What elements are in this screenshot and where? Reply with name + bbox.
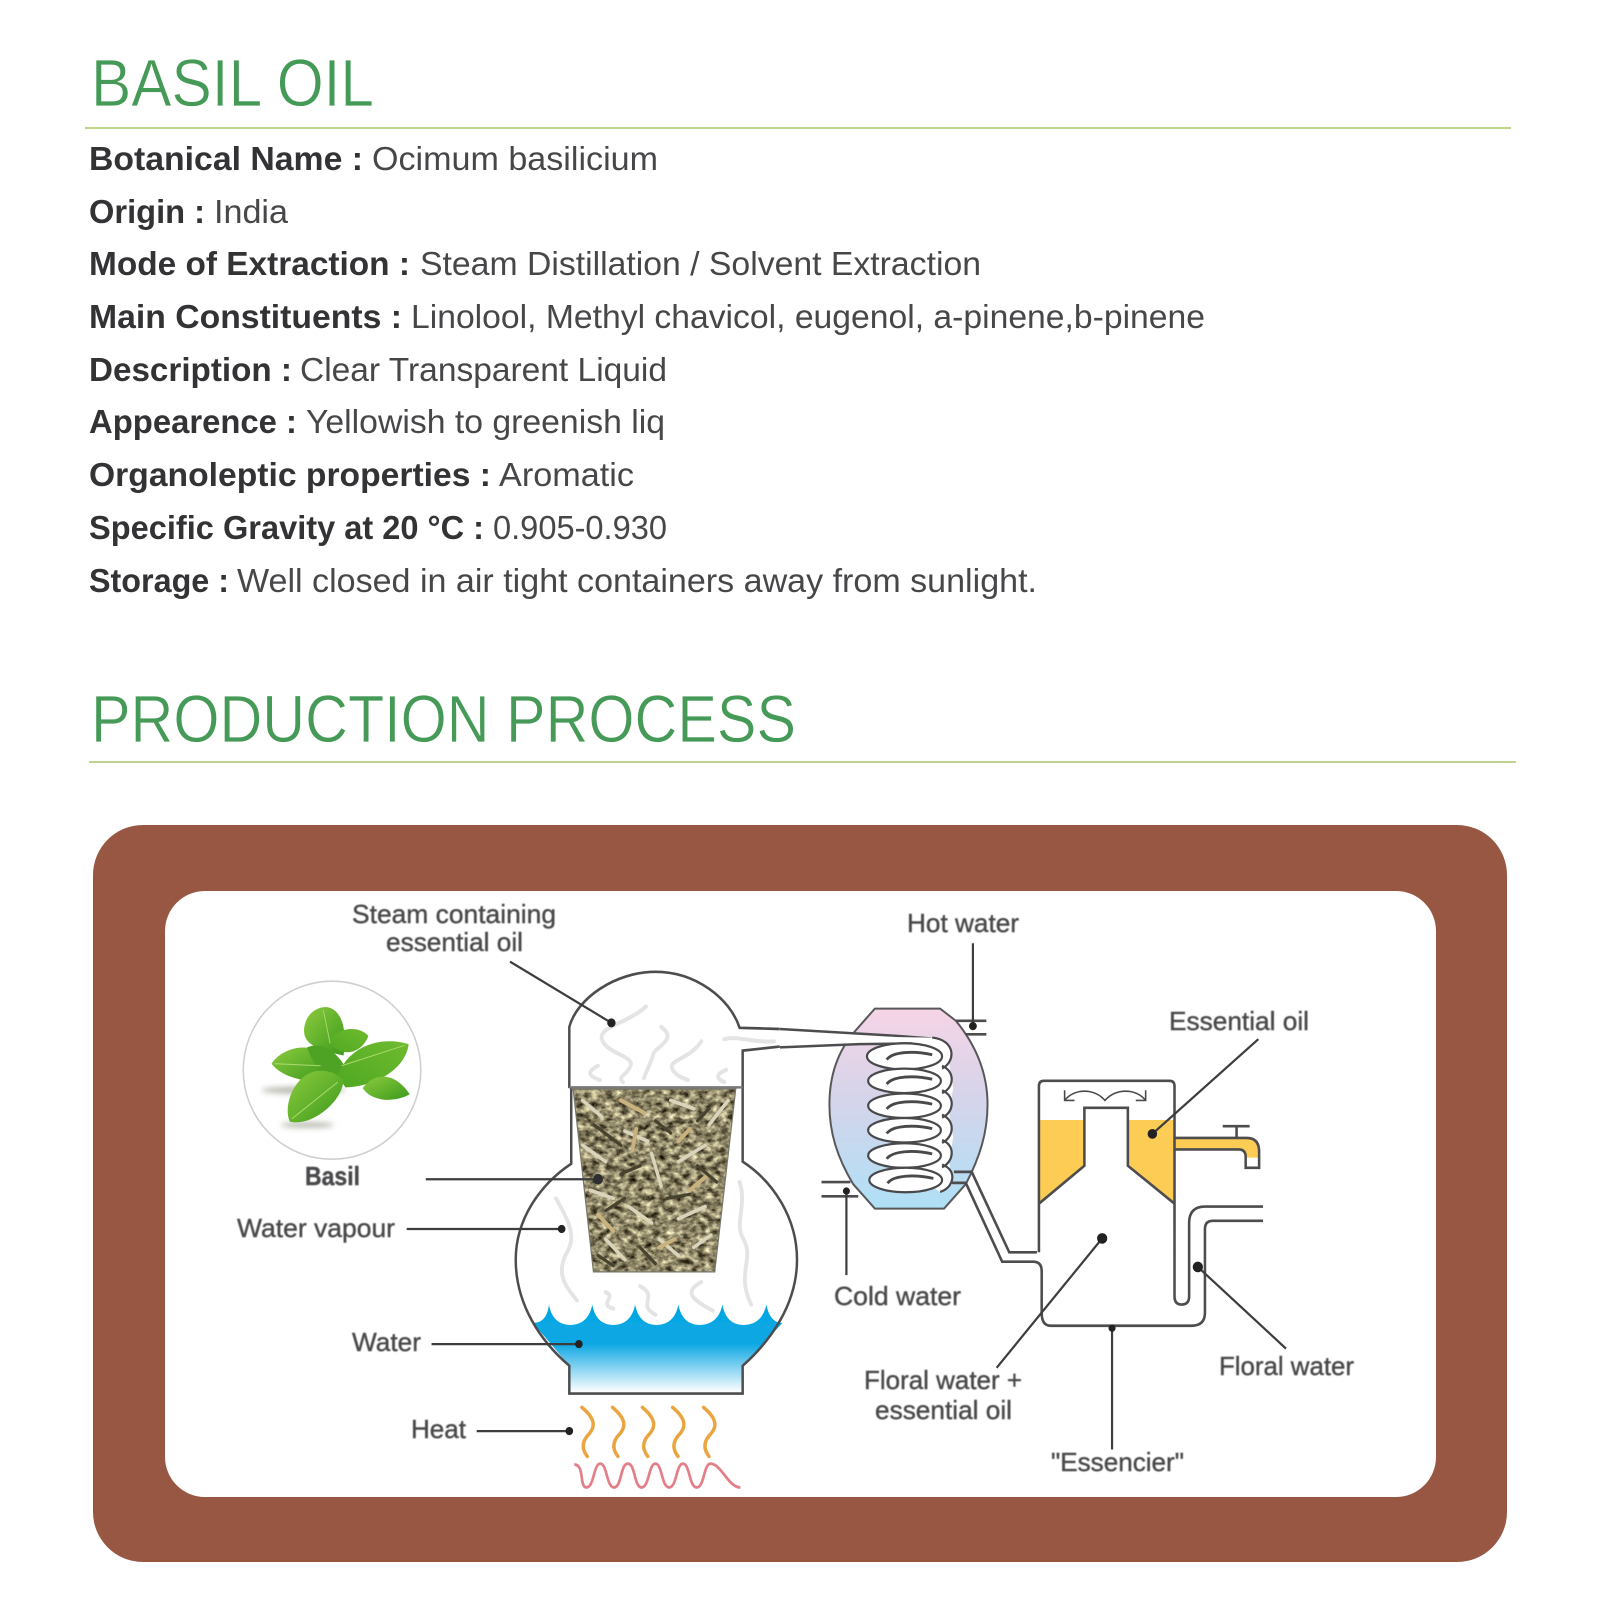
property: specific gravity [89,509,667,546]
label: floral water plus essential oil: essential oil [875,1395,1012,1425]
title: basil oil: BASIL OIL [91,46,374,121]
property: origin [89,193,289,230]
property: main constituents: Main Constituents : [89,298,402,335]
label: cold water: Cold water [834,1281,961,1311]
diagram labels [237,899,1354,1477]
panel: white diagram area [165,891,1436,1497]
property: main constituents: Linolool, Methyl chavicol, eugenol, a-pinene,b-pinene [411,298,1205,335]
properties list [89,140,1205,599]
property: description: Clear Transparent Liquid [300,351,667,388]
property: description: Description : [89,351,292,388]
property: botanical name: Ocimum basilicium [372,140,658,177]
property: appearance: Yellowish to greenish liq [306,403,665,440]
hot and cold water ports [822,1021,986,1196]
property: storage: Storage : [89,562,229,599]
panel: production process diagram [93,825,1507,1562]
flames [582,1407,715,1456]
divider under title [85,127,1511,129]
still divider [569,1084,743,1090]
divider under production heading [89,761,1516,763]
property: specific gravity: Specific Gravity at 20 °C : [89,509,484,546]
property: mode of extraction [89,245,981,282]
label: essencier: "Essencier" [1051,1447,1184,1477]
condensate outlet pipe [952,1172,1042,1271]
label: floral water: Floral water [1219,1351,1354,1381]
label: steam containing essential oil [352,899,556,957]
vapour pipe [780,1029,930,1047]
essencier vessel [1039,1081,1263,1326]
tap [1175,1126,1259,1168]
label: floral water plus essential oil: Floral water + [864,1365,1022,1395]
property: mode of extraction: Mode of Extraction : [89,245,410,282]
still apparatus [407,962,797,1487]
heating element [574,1464,740,1487]
basil leaves [261,1007,410,1128]
oil layer [1039,1120,1259,1204]
inner cone [1039,1108,1175,1204]
still body outline [516,972,797,1394]
label: steam containing essential oil: essential oil [386,927,523,957]
property: appearance: Appearence : [89,403,297,440]
label: water: Water [352,1327,421,1357]
property: organoleptic properties: Organoleptic properties : [89,456,491,493]
label: water vapour: Water vapour [237,1213,395,1243]
leader lines and dots [407,962,616,1435]
basil circle outline [243,981,421,1159]
property: description [89,351,667,388]
steam wisps [556,1007,774,1315]
condenser and essencier [780,943,1286,1449]
panel: brown frame [93,825,1507,1562]
property: specific gravity: 0.905-0.930 [493,509,667,546]
property: origin: Origin : [89,193,205,230]
water [533,1305,782,1392]
basil leaf illustration [243,981,421,1159]
cooling coil [867,1037,953,1192]
heading: production process: PRODUCTION PROCESS [91,682,796,757]
leader lines and dots [843,943,1286,1449]
property: appearance [89,403,665,440]
property: botanical name [89,140,658,177]
property: botanical name: Botanical Name : [89,140,363,177]
label: heat: Heat [411,1414,467,1444]
label: basil: Basil [305,1161,360,1191]
property: organoleptic properties: Aromatic [499,456,634,493]
condenser vessel [829,1009,988,1209]
property: mode of extraction: Steam Distillation / Solvent Extraction [420,245,981,282]
label: steam containing essential oil: Steam containing [352,899,556,929]
label: essential oil: Essential oil [1169,1006,1309,1036]
property: storage: Well closed in air tight containers away from sunlight. [237,562,1037,599]
label: hot water: Hot water [907,908,1019,938]
property: origin: India [214,193,289,230]
dried basil basket [567,1086,740,1276]
arrows [1065,1090,1146,1100]
label: floral water plus essential oil [864,1365,1022,1425]
property: main constituents [89,298,1205,335]
